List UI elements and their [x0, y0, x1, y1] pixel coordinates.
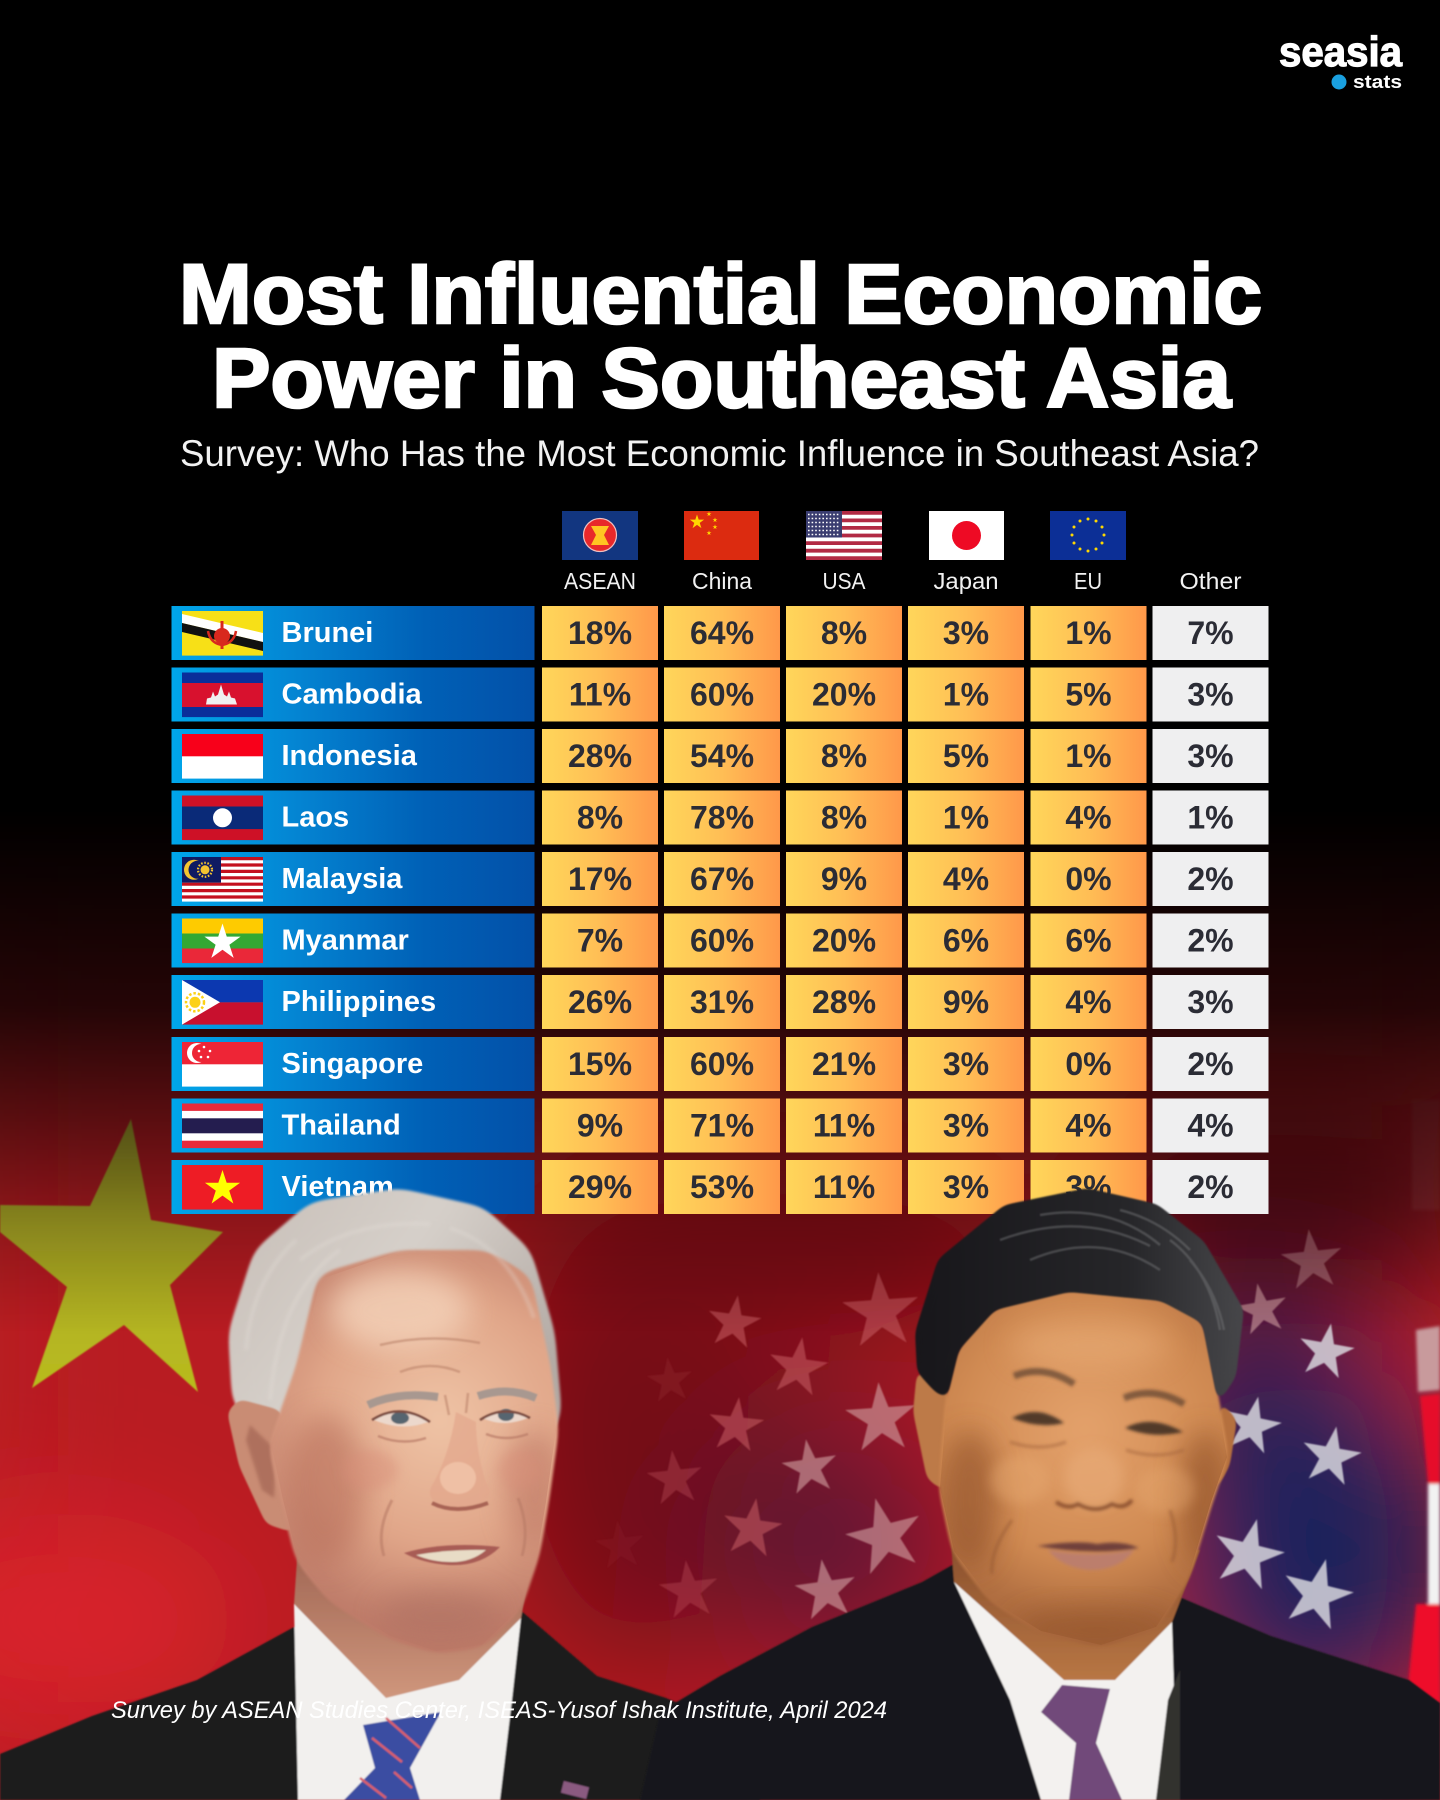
portrait: man in black suit with purple tie, right [640, 1188, 1440, 1800]
row: Thailand: 11% [813, 1108, 875, 1144]
column: ASEAN [562, 511, 638, 594]
row: Singapore: 3% [943, 1046, 989, 1082]
logo: seasia stats: stats [1353, 71, 1402, 92]
row: Vietnam: 3% [943, 1169, 989, 1205]
row: Indonesia: 1% [1065, 738, 1112, 774]
portrait: man in dark suit with blue tie, left [0, 1188, 760, 1800]
row: Brunei: 64% [690, 615, 754, 651]
row: Malaysia: 0% [1065, 861, 1112, 897]
face [938, 1288, 1229, 1648]
brows [368, 1395, 438, 1405]
row: Philippines: 28% [812, 984, 876, 1020]
row: Indonesia [172, 729, 1268, 783]
row: Malaysia: 17% [568, 861, 632, 897]
row: Laos: 78% [690, 800, 754, 836]
source note: Survey by ASEAN Studies Center, ISEAS-Yusof Ishak Institute, April 2024 [111, 1697, 887, 1724]
row: Thailand: Thailand [282, 1110, 401, 1142]
row: Myanmar: 2% [1187, 922, 1234, 958]
ear [227, 1399, 300, 1533]
row: Singapore: 21% [812, 1046, 876, 1082]
hair [228, 1188, 562, 1454]
row: Indonesia: Indonesia [282, 740, 418, 772]
column: Japan: Japan [934, 568, 998, 594]
row: Laos: 8% [821, 800, 867, 836]
flag: Malaysia [182, 857, 263, 902]
column: ASEAN: ASEAN [564, 568, 636, 594]
row: Brunei: Brunei [282, 617, 373, 649]
row: Thailand: 9% [577, 1108, 623, 1144]
row: Thailand: 71% [690, 1108, 754, 1144]
subtitle: Survey: Who Has the Most Economic Influence in Southeast Asia? [180, 433, 1259, 474]
row: Myanmar: 6% [943, 922, 989, 958]
row: Laos: Laos [282, 802, 349, 834]
row: Philippines: 31% [690, 984, 754, 1020]
mouth [1037, 1542, 1139, 1552]
flag: Vietnam [182, 1165, 263, 1210]
row: Singapore: 2% [1187, 1046, 1234, 1082]
flag: Brunei [182, 611, 263, 656]
row: Vietnam: 3% [1065, 1169, 1112, 1205]
row: Laos: 4% [1065, 800, 1112, 836]
row: Philippines: 4% [1065, 984, 1112, 1020]
face [268, 1250, 559, 1654]
suit, shirt, neck and tie [0, 1545, 760, 1800]
row: Vietnam: 11% [813, 1169, 875, 1205]
column: China [684, 511, 759, 594]
row: Vietnam: 2% [1187, 1169, 1234, 1205]
row: Thailand: 4% [1187, 1108, 1234, 1144]
row: Cambodia: 5% [1065, 676, 1112, 712]
row: Singapore: Singapore [282, 1048, 423, 1080]
hair strands [1000, 1210, 1224, 1330]
row: Vietnam: Vietnam [282, 1171, 394, 1203]
flag: red and white stripes at right edge [1408, 1100, 1440, 1705]
row: Malaysia: 9% [821, 861, 867, 897]
row: Cambodia: 20% [812, 676, 876, 712]
title: Power in Southeast Asia [212, 331, 1232, 425]
facial features [368, 1338, 536, 1565]
row: Philippines: 26% [568, 984, 632, 1020]
face shading [285, 1270, 563, 1639]
smile lines [381, 1498, 525, 1556]
row: Indonesia: 8% [821, 738, 867, 774]
flag: Singapore [182, 1042, 263, 1087]
row: Vietnam [172, 1160, 1268, 1214]
row: Thailand [172, 1098, 1268, 1152]
row: Myanmar: 20% [812, 922, 876, 958]
row: Vietnam: 53% [690, 1169, 754, 1205]
row: Indonesia: 54% [690, 738, 754, 774]
row: Indonesia: 3% [1187, 738, 1234, 774]
forehead creases [380, 1338, 480, 1415]
row: Singapore: 60% [690, 1046, 754, 1082]
row: Cambodia: 11% [569, 676, 631, 712]
row: Myanmar: 7% [577, 922, 623, 958]
ears [913, 1370, 955, 1492]
hair [915, 1188, 1244, 1404]
row: Myanmar: 60% [690, 922, 754, 958]
title [179, 247, 1262, 425]
flag: Philippines [182, 980, 263, 1025]
mouth [404, 1545, 500, 1565]
row: Myanmar: Myanmar [282, 924, 409, 956]
row: Cambodia [172, 668, 1268, 722]
suit, shirt, neck and tie [640, 1530, 1440, 1800]
row: Brunei: 7% [1187, 615, 1234, 651]
row: Singapore: 15% [568, 1046, 632, 1082]
flag: Thailand [182, 1104, 263, 1148]
facial features [992, 1372, 1184, 1574]
flag: Cambodia [182, 672, 263, 717]
row: Brunei: 1% [1065, 615, 1112, 651]
eyes [1012, 1412, 1064, 1425]
row: Brunei: 8% [821, 615, 867, 651]
row: Indonesia: 5% [943, 738, 989, 774]
row: Malaysia [172, 852, 1268, 906]
row: Laos [172, 790, 1268, 844]
brows [1014, 1372, 1074, 1384]
nose [1064, 1448, 1124, 1508]
column: Other: Other [1180, 568, 1242, 594]
row: Vietnam: 29% [568, 1169, 632, 1205]
row: Cambodia: 3% [1187, 676, 1234, 712]
row: Thailand: 4% [1065, 1108, 1112, 1144]
row: Brunei: 3% [943, 615, 989, 651]
flag: Laos [182, 796, 263, 840]
row: Malaysia: 4% [943, 861, 989, 897]
row: Laos: 1% [1187, 800, 1234, 836]
row: Malaysia: 2% [1187, 861, 1234, 897]
row: Philippines: 9% [943, 984, 989, 1020]
row: Cambodia: 1% [943, 676, 989, 712]
row: Singapore: 0% [1065, 1046, 1112, 1082]
flag: Myanmar [182, 918, 263, 963]
row: Laos: 1% [943, 800, 989, 836]
row: Thailand: 3% [943, 1108, 989, 1144]
eyes [374, 1412, 428, 1427]
column: USA [806, 511, 882, 594]
row: Brunei [172, 606, 1268, 660]
row: Philippines: 3% [1187, 984, 1234, 1020]
China flag star [0, 1119, 223, 1392]
nose [430, 1412, 490, 1508]
row: Brunei: 18% [568, 615, 632, 651]
row: Cambodia: Cambodia [282, 678, 423, 710]
column: USA: USA [822, 568, 866, 594]
row: Myanmar: 6% [1065, 922, 1112, 958]
row: Indonesia: 28% [568, 738, 632, 774]
table rows [172, 606, 1268, 1214]
column: China: China [692, 568, 752, 594]
row: Laos: 8% [577, 800, 623, 836]
table column headers [562, 511, 1242, 594]
logo: seasia stats: seasia [1279, 28, 1403, 75]
column: Japan [929, 511, 1004, 594]
flag: Indonesia [182, 734, 263, 779]
row: Myanmar [172, 914, 1268, 968]
hair strands [246, 1224, 534, 1400]
face shading [940, 1321, 1231, 1652]
row: Singapore [172, 1037, 1268, 1091]
cheek folds [992, 1510, 1176, 1574]
US flag stars [593, 1226, 1365, 1633]
column: EU [1050, 511, 1126, 594]
row: Philippines [172, 975, 1268, 1029]
column: EU: EU [1074, 568, 1102, 594]
title: Most Influential Economic [179, 247, 1262, 341]
row: Philippines: Philippines [282, 986, 436, 1018]
row: Malaysia: Malaysia [282, 863, 403, 895]
row: Cambodia: 60% [690, 676, 754, 712]
row: Malaysia: 67% [690, 861, 754, 897]
